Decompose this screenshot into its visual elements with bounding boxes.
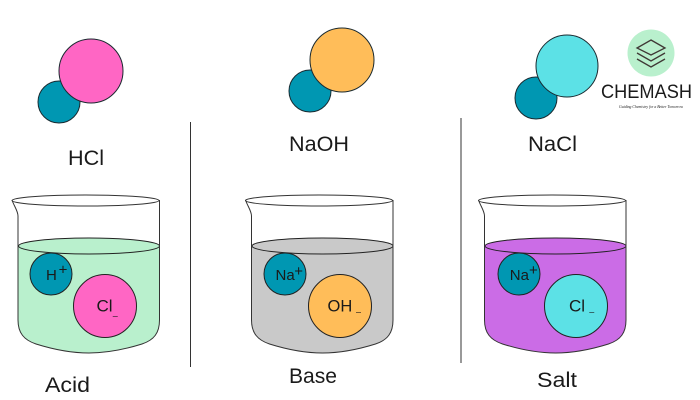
molecule: NaOH <box>289 28 374 112</box>
label: Acid: Acid <box>45 374 90 397</box>
logo tagline: Guiding Chemistry for a Better Tomorrow <box>619 104 683 109</box>
beaker outline <box>478 195 626 353</box>
label: NaCl: NaCl <box>528 133 577 156</box>
label: Base: Base <box>289 365 337 388</box>
liquid: salt <box>484 246 626 353</box>
ion: H+: + <box>59 262 68 278</box>
ion: OH-: OH <box>328 298 352 316</box>
logo: CHEMASH <box>601 30 692 109</box>
logo wordmark: CHEMASH <box>601 82 692 103</box>
ion: Na+ <box>264 253 306 295</box>
molecule: NaCl <box>515 35 598 119</box>
ion: Na+ <box>498 253 540 295</box>
liquid: acid <box>18 246 160 353</box>
ion: Na+: + <box>529 262 538 279</box>
ion: Cl-: Cl <box>569 297 585 316</box>
ion: H+ <box>30 253 72 295</box>
ion: Na+: + <box>294 263 303 280</box>
panel: base beaker <box>246 195 393 353</box>
logo icon: stacked layers <box>628 30 674 76</box>
ion: Cl-: Cl <box>96 297 113 316</box>
beaker outline <box>12 195 160 353</box>
ion: OH-: – <box>356 306 361 316</box>
ion: Cl- <box>74 274 136 338</box>
ion: Cl-: – <box>589 306 594 316</box>
ion: OH- <box>308 274 372 338</box>
molecule: HCl <box>38 39 123 123</box>
ion: H+: H <box>46 267 57 284</box>
ion: Na+: Na <box>510 267 530 284</box>
panel: acid beaker <box>12 195 160 353</box>
label: Salt: Salt <box>537 369 577 392</box>
beaker outline <box>246 195 393 353</box>
panel: salt beaker <box>478 195 626 353</box>
ion: Cl-: – <box>113 310 118 320</box>
label: NaOH: NaOH <box>289 133 349 156</box>
ion: Cl- <box>544 274 608 338</box>
ion: Na+: Na <box>276 267 295 284</box>
label: HCl: HCl <box>68 147 104 170</box>
liquid: base <box>252 246 393 353</box>
